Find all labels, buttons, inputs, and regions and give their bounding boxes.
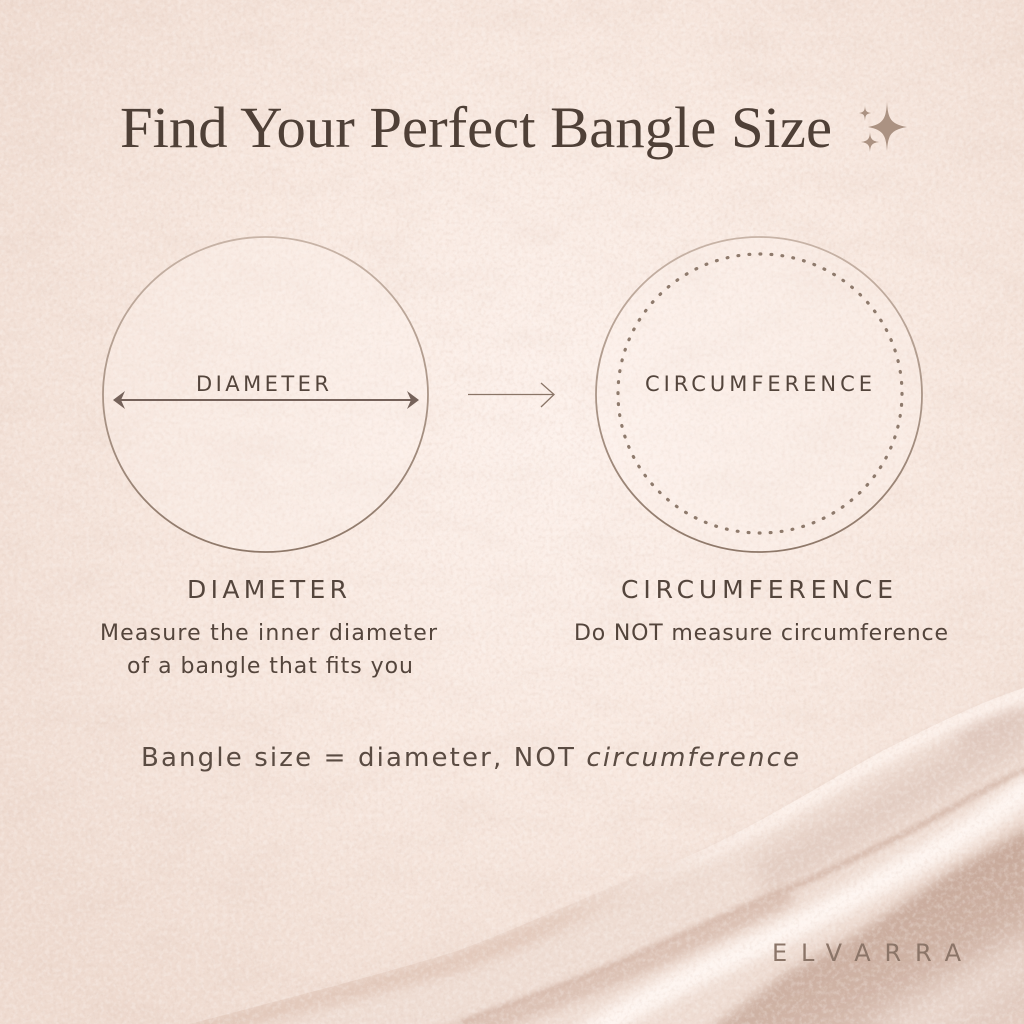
- shadow under upper edge: [192, 888, 638, 1024]
- diameter circle label: DIAMETER: [196, 372, 329, 396]
- shade between ridge and crease: [760, 730, 1024, 880]
- diameter instructions: Measure the inner diameter: [100, 621, 438, 646]
- diameter instructions: of a bangle that fits you: [127, 654, 413, 679]
- column: diameter caption: [100, 575, 445, 679]
- title: Find Your Perfect Bangle Size: [120, 95, 832, 160]
- icon: double-headed diameter arrow: [113, 391, 419, 409]
- column: circumference caption: [574, 575, 948, 646]
- brand logo: ELVARRA: [772, 939, 962, 967]
- bright band: [580, 783, 1024, 1024]
- diagram: circumference circle: [596, 237, 922, 552]
- icon: sparkles: [859, 102, 907, 152]
- circumference circle label: CIRCUMFERENCE: [645, 372, 872, 396]
- dark lower-right fold: [690, 824, 1024, 1024]
- bright ridge on upper edge: [620, 688, 1024, 898]
- dotted circumference ring: [618, 254, 902, 533]
- formula statement: Bangle size = diameter, NOT circumference: [141, 743, 799, 773]
- diagram: diameter circle: [103, 237, 428, 552]
- circumference heading: CIRCUMFERENCE: [621, 575, 893, 604]
- light lower corner: [880, 945, 1024, 1024]
- shadow below left crease: [440, 895, 790, 1024]
- circumference instruction: Do NOT measure circumference: [574, 621, 948, 646]
- crease line: [461, 766, 1024, 1024]
- silk fold drape: [190, 688, 1024, 1024]
- arrow: diameter to circumference: [468, 383, 554, 407]
- diameter heading: DIAMETER: [187, 575, 347, 604]
